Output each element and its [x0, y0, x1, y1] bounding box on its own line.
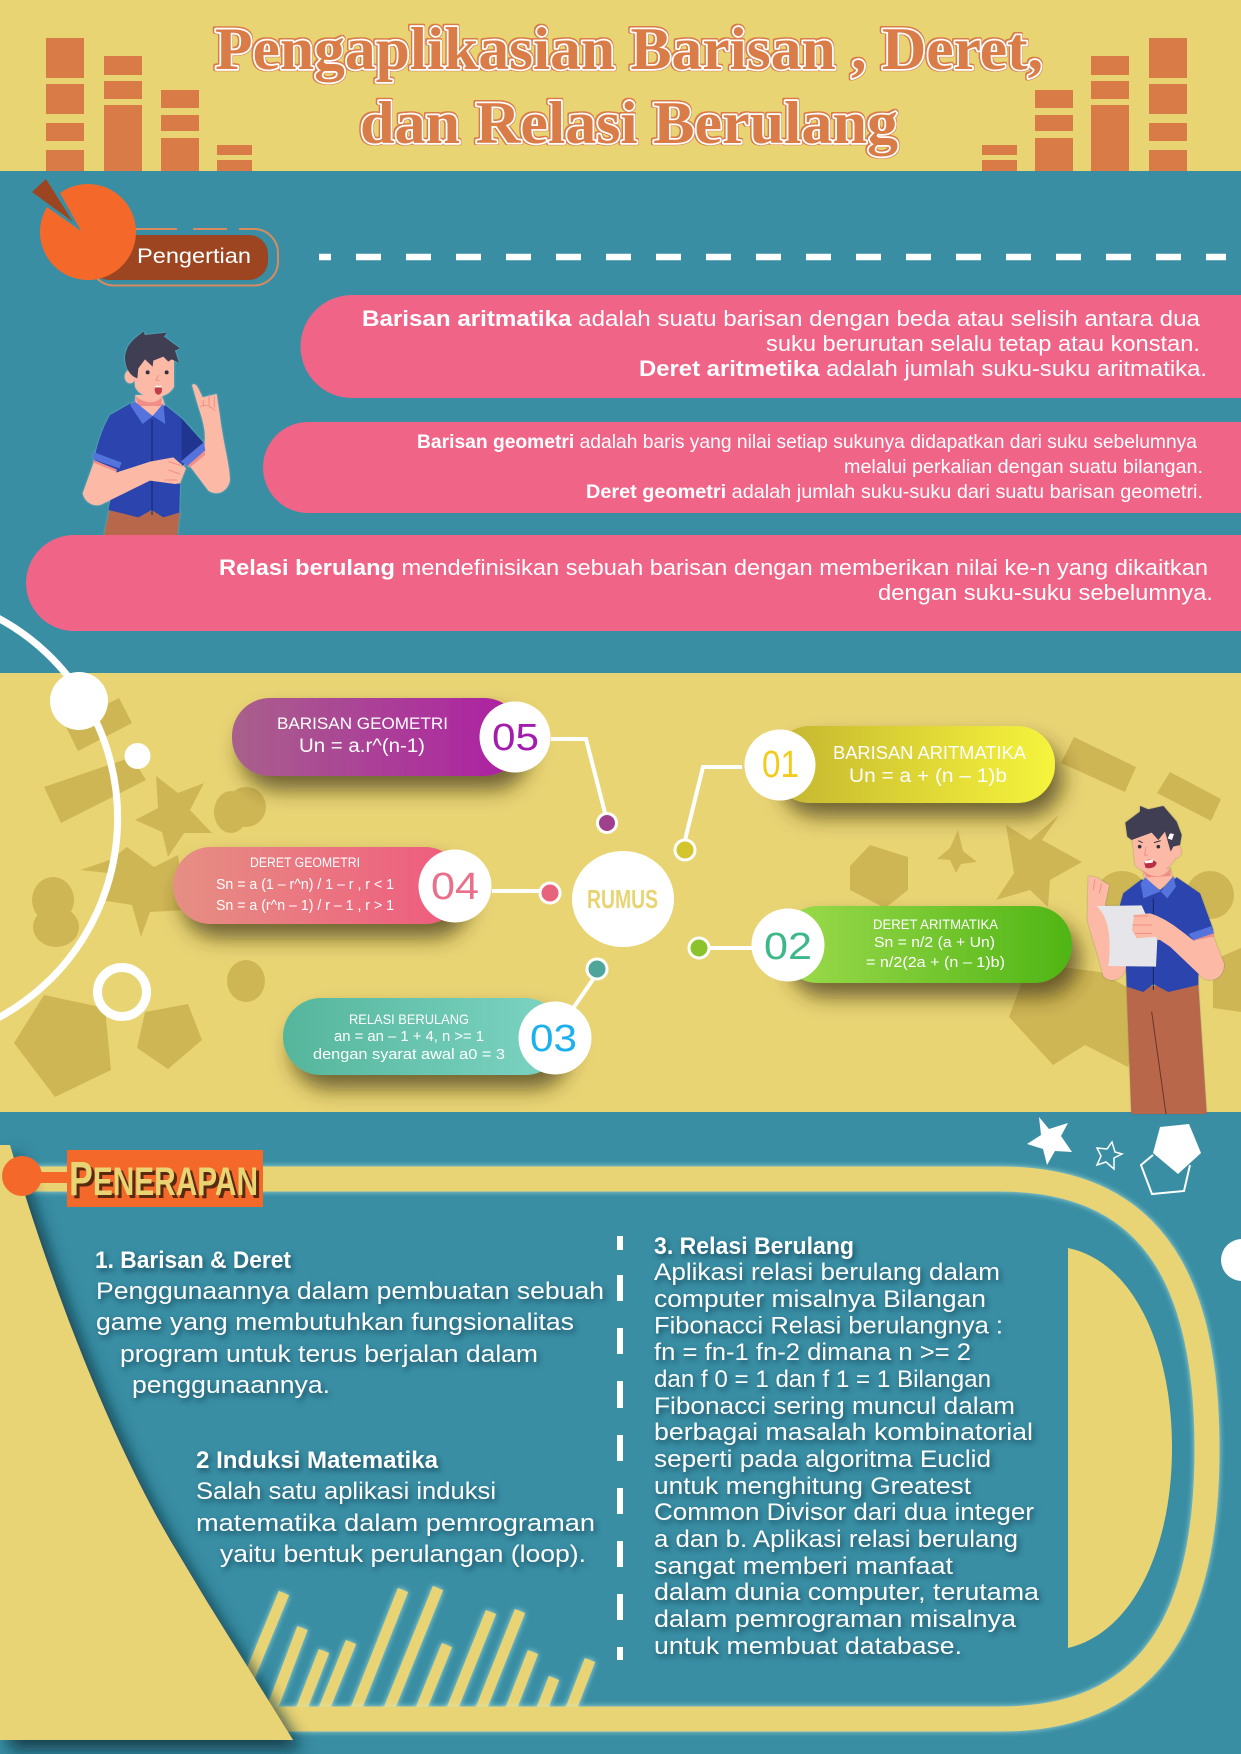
- text block: induksi matematika: Salah satu aplikasi induksi: [196, 1478, 496, 1505]
- text block: relasi berulang: Common Divisor dari dua integer: [654, 1499, 1034, 1526]
- section badge: pengertian: Pengertian: [137, 245, 251, 268]
- text block: relasi berulang: 3. Relasi Berulang: [654, 1233, 854, 1260]
- text block: barisan dan deret: 1. Barisan & Deret: [95, 1247, 291, 1274]
- formula card 03: relasi berulang: dengan syarat awal a0 = 3: [313, 1046, 505, 1063]
- text block: relasi berulang: fn = fn-1 fn-2 dimana n >= 2: [654, 1339, 971, 1366]
- panel: penerapan: [0, 1117, 1241, 1740]
- title: [215, 16, 1043, 156]
- formula card 04: deret geometri: 04: [431, 866, 479, 908]
- text block: induksi matematika: matematika dalam pemrograman: [196, 1510, 595, 1537]
- formula card 01: barisan aritmatika: BARISAN ARITMATIKA: [833, 743, 1026, 763]
- text block: relasi berulang: seperti pada algoritma Euclid: [654, 1446, 991, 1473]
- formula card 01: barisan aritmatika: Un = a + (n – 1)b: [849, 766, 1007, 787]
- connector lines: [492, 739, 752, 1007]
- slanted bar decoration: [234, 1588, 590, 1714]
- text block: relasi berulang: untuk membuat database.: [654, 1633, 962, 1660]
- text block: relasi berulang: dalam pemrograman misalnya: [654, 1606, 1017, 1633]
- hub: rumus: RUMUS: [587, 884, 658, 914]
- text block: barisan dan deret: [95, 1247, 604, 1399]
- formula card 03: relasi berulang: RELASI BERULANG: [349, 1011, 469, 1027]
- dashed divider: [319, 254, 1226, 260]
- definition: barisan dan deret aritmatika: Barisan aritmatika adalah suatu barisan dengan beda atau selisih antara dua: [362, 306, 1201, 331]
- formula card 04: deret geometri: DERET GEOMETRI: [250, 855, 360, 870]
- heading: penerapan: [2, 1150, 263, 1207]
- definition: barisan dan deret geometri: [263, 422, 1241, 513]
- heading: penerapan: PENERAPAN: [69, 1153, 258, 1206]
- formula card 04: deret geometri: Sn = a (1 – r^n) / 1 – r , r < 1: [216, 877, 394, 893]
- track frame: [30, 1179, 1207, 1719]
- decorative circles: [50, 672, 150, 1016]
- decorative stars and pentagons: [1027, 1117, 1201, 1194]
- formula card 03: relasi berulang: an = an – 1 + 4, n >= 1: [334, 1028, 484, 1045]
- text block: barisan dan deret: Penggunaannya dalam pembuatan sebuah: [96, 1278, 604, 1305]
- panel: pengertian: [26, 179, 1241, 631]
- formula card 02: deret aritmatika: Sn = n/2 (a + Un): [874, 934, 995, 951]
- formula card 03: relasi berulang: 03: [530, 1018, 577, 1060]
- definition: relasi berulang: Relasi berulang mendefinisikan sebuah barisan dengan memberikan nilai ke-n yang dikaitkan: [219, 555, 1208, 580]
- formula card 04: deret geometri: [173, 847, 492, 924]
- definition: barisan dan deret aritmatika: [300, 295, 1241, 398]
- text block: relasi berulang: dalam dunia computer, terutama: [654, 1579, 1040, 1606]
- definition: relasi berulang: [26, 535, 1241, 631]
- bar decoration right: [982, 38, 1187, 171]
- text block: relasi berulang: Aplikasi relasi berulang dalam: [654, 1259, 1000, 1286]
- formula card 01: barisan aritmatika: 01: [762, 744, 799, 786]
- text block: relasi berulang: Fibonacci Relasi berulangnya :: [654, 1312, 1003, 1340]
- hub: rumus: [572, 851, 674, 947]
- text block: barisan dan deret: penggunaannya.: [132, 1372, 330, 1399]
- text block: relasi berulang: sangat memberi manfaat: [654, 1553, 953, 1580]
- formula card 05: barisan geometri: [232, 698, 550, 776]
- formula card 05: barisan geometri: BARISAN GEOMETRI: [277, 714, 448, 733]
- formula card 03: relasi berulang: [283, 998, 592, 1075]
- panel: header: [0, 0, 1241, 171]
- definition: barisan dan deret aritmatika: suku berurutan selalu tetap atau konstan.: [766, 331, 1200, 356]
- yellow wedge: [0, 1145, 293, 1740]
- character: man reading paper: [1087, 806, 1224, 1114]
- text block: relasi berulang: untuk menghitung Greatest: [654, 1473, 971, 1500]
- bar decoration left: [46, 38, 252, 171]
- panel: rumus: [0, 618, 1241, 1114]
- definition: barisan dan deret geometri: Deret geometri adalah jumlah suku-suku dari suatu barisan geometri.: [586, 481, 1203, 503]
- formula card 02: deret aritmatika: 02: [764, 926, 812, 968]
- half ellipse decoration: [1068, 1248, 1172, 1648]
- text block: relasi berulang: berbagai masalah kombinatorial: [654, 1419, 1033, 1446]
- definition: relasi berulang: dengan suku-suku sebelumnya.: [878, 580, 1213, 605]
- text block: relasi berulang: computer misalnya Bilangan: [654, 1286, 986, 1313]
- section badge: pengertian: [32, 179, 278, 286]
- text block: induksi matematika: [196, 1447, 595, 1568]
- text block: relasi berulang: dan f 0 = 1 dan f 1 = 1 Bilangan: [654, 1366, 991, 1393]
- formula card 04: deret geometri: Sn = a (r^n – 1) / r – 1 , r > 1: [216, 898, 394, 914]
- title: dan Relasi Berulang: [360, 90, 898, 156]
- definition: barisan dan deret geometri: Barisan geometri adalah baris yang nilai setiap sukunya didapatkan dari suku sebelumnya: [417, 431, 1197, 453]
- formula card 05: barisan geometri: Un = a.r^(n-1): [299, 736, 425, 757]
- definition: barisan dan deret geometri: melalui perkalian dengan suatu bilangan.: [844, 456, 1203, 478]
- decorative arc: [0, 618, 118, 1018]
- text block: relasi berulang: Fibonacci sering muncul dalam: [654, 1393, 1015, 1420]
- character: man pointing up: [83, 332, 230, 535]
- text block: barisan dan deret: game yang membutuhkan fungsionalitas: [96, 1309, 574, 1336]
- definition: barisan dan deret aritmatika: Deret aritmetika adalah jumlah suku-suku aritmatika.: [639, 356, 1207, 381]
- text block: barisan dan deret: program untuk terus berjalan dalam: [120, 1341, 538, 1368]
- dashed column divider: [617, 1236, 623, 1660]
- white half circle: [1221, 1239, 1241, 1281]
- formula card 05: barisan geometri: 05: [492, 717, 539, 759]
- text block: induksi matematika: 2 Induksi Matematika: [196, 1447, 439, 1474]
- text block: relasi berulang: a dan b. Aplikasi relasi berulang: [654, 1526, 1018, 1553]
- text block: induksi matematika: yaitu bentuk perulangan (loop).: [220, 1541, 586, 1568]
- title: Pengaplikasian Barisan , Deret,: [215, 16, 1043, 82]
- text block: relasi berulang: [654, 1233, 1040, 1660]
- formula card 02: deret aritmatika: [752, 906, 1072, 983]
- connector dots: [540, 814, 709, 979]
- formula card 02: deret aritmatika: = n/2(2a + (n – 1)b): [866, 954, 1005, 971]
- formula card 02: deret aritmatika: DERET ARITMATIKA: [873, 916, 999, 932]
- formula card 01: barisan aritmatika: [744, 726, 1055, 803]
